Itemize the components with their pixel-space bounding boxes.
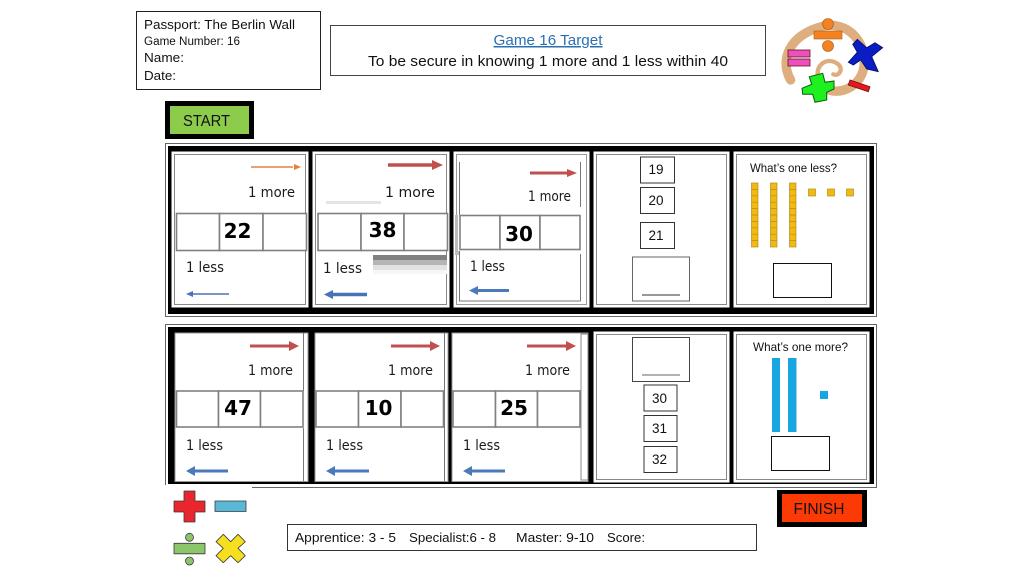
card: number 30 bbox=[454, 152, 588, 306]
passport info panel: Date: bbox=[144, 68, 176, 83]
card: number 47: 1 more bbox=[248, 363, 293, 379]
panel: top game row bbox=[166, 144, 876, 316]
card: what's one less: What’s one less? bbox=[750, 161, 837, 175]
card: what's one more bbox=[734, 332, 868, 482]
passport info panel: Game Number: 16 bbox=[144, 36, 240, 48]
card: number 22 bbox=[172, 152, 308, 306]
card: number 10: 10 bbox=[365, 396, 392, 420]
card: number 10: 1 more bbox=[388, 363, 433, 379]
icon: four operations bbox=[164, 485, 252, 565]
score bar: Apprentice: 3 - 5 bbox=[295, 530, 396, 545]
card: number 25: 1 less bbox=[463, 438, 500, 454]
card: number sequence 19 20 21: 20 bbox=[648, 193, 664, 208]
score bar: Score: bbox=[607, 530, 645, 545]
card: number 10: 1 less bbox=[326, 438, 363, 454]
card: number 30: 1 more bbox=[528, 189, 571, 205]
finish button: FINISH bbox=[794, 501, 844, 518]
chart: base ten rods, 2 tens 1 one bbox=[772, 358, 828, 432]
card: number 22: 1 less bbox=[186, 260, 224, 276]
card: number 47 bbox=[175, 333, 308, 482]
card: number 38 bbox=[314, 152, 448, 306]
chart: base ten rods, 3 tens 3 ones bbox=[752, 183, 854, 247]
start button bbox=[165, 101, 254, 139]
score bar: Specialist:6 - 8 bbox=[409, 530, 496, 545]
panel: bottom game row bbox=[166, 324, 876, 488]
game target banner: To be secure in knowing 1 more and 1 less within 40 bbox=[368, 53, 728, 70]
card: number sequence 30 31 32 bbox=[594, 332, 728, 482]
finish button bbox=[777, 490, 867, 527]
score bar: Master: 9-10 bbox=[516, 530, 594, 545]
card: number 25: 25 bbox=[500, 396, 528, 420]
card: number 47: 47 bbox=[224, 396, 252, 420]
card: number sequence 30 31 32: 30 bbox=[652, 391, 667, 406]
card: number 22: 1 more bbox=[248, 185, 295, 201]
card: number 47: 1 less bbox=[186, 438, 223, 454]
card: number sequence 30 31 32: 32 bbox=[652, 452, 667, 467]
passport info panel bbox=[136, 12, 320, 90]
game target banner bbox=[330, 26, 766, 76]
card: number sequence 19 20 21: 21 bbox=[648, 228, 664, 243]
card: what's one more: What’s one more? bbox=[753, 340, 848, 354]
card: number sequence 19 20 21 bbox=[594, 152, 728, 306]
passport info panel: Name: bbox=[144, 50, 184, 65]
card: number 38: 1 less bbox=[323, 261, 362, 277]
card: number 22: 22 bbox=[224, 219, 251, 243]
card: number 38: 1 more bbox=[385, 185, 435, 201]
score bar bbox=[288, 524, 756, 550]
passport info panel: Passport: The Berlin Wall bbox=[144, 17, 295, 32]
card: number sequence 19 20 21: 19 bbox=[648, 162, 664, 177]
card: number 30: 30 bbox=[505, 222, 533, 246]
icon: maths swirl logo bbox=[786, 18, 883, 102]
card: what's one less bbox=[734, 152, 868, 306]
card: number 10 bbox=[315, 333, 448, 482]
start button: START bbox=[183, 113, 230, 130]
card: number 30: 1 less bbox=[470, 259, 505, 275]
game target banner: Game 16 Target bbox=[494, 32, 603, 49]
card: number sequence 30 31 32: 31 bbox=[652, 421, 667, 436]
card: number 38: 38 bbox=[369, 218, 396, 242]
card: number 25: 1 more bbox=[525, 363, 570, 379]
card: number 25 bbox=[452, 333, 588, 482]
